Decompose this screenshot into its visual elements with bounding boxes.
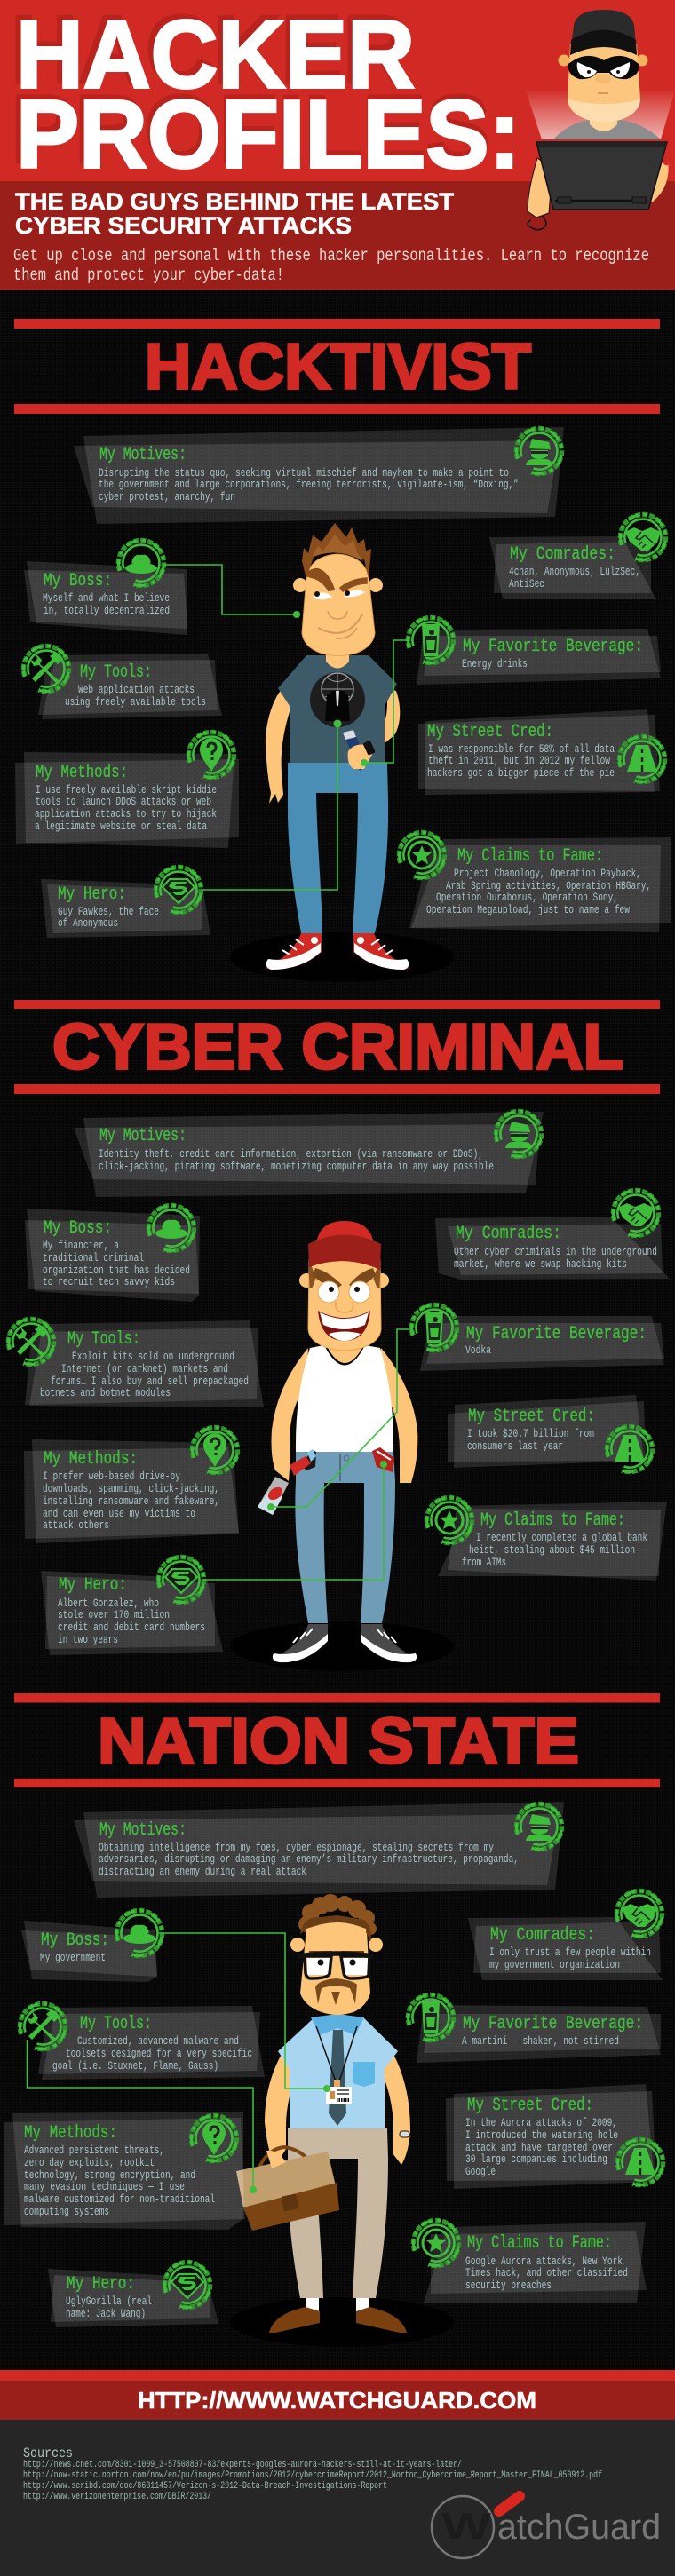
text block: the government and large corporations, freeing terrorists, vigilante-ism, “Doxing,” bbox=[99, 479, 519, 491]
title: HACKER bbox=[16, 0, 415, 108]
text block bbox=[43, 1470, 219, 1532]
footer banner bbox=[0, 2370, 675, 2420]
icon: location pin bbox=[191, 2116, 236, 2161]
text block: I prefer web-based drive-by bbox=[43, 1470, 180, 1483]
panel: hacktivist motives bbox=[74, 427, 564, 524]
text block bbox=[99, 1148, 494, 1173]
panel background bbox=[4, 2112, 245, 2230]
panel: criminal claims to fame bbox=[426, 1498, 667, 1581]
text block bbox=[467, 1428, 594, 1453]
panel background bbox=[417, 629, 661, 685]
section heading: Cyber Criminal: CYBER CRIMINAL bbox=[52, 1012, 623, 1083]
icon: glass bbox=[408, 618, 453, 663]
text block bbox=[509, 566, 640, 590]
panel background bbox=[435, 1217, 670, 1280]
heading: My Motives: bbox=[99, 445, 187, 465]
text block: Customized, advanced malware and bbox=[77, 2035, 239, 2048]
panel background bbox=[468, 1917, 663, 1980]
text block: Guy Fawkes, the face bbox=[58, 906, 159, 918]
panel background bbox=[25, 1209, 200, 1302]
sources: http://www.verizonenterprise.com/DBIR/2013/ bbox=[23, 2492, 211, 2502]
panel: hacktivist hero bbox=[41, 868, 210, 938]
panel background bbox=[24, 561, 187, 635]
intro paragraph bbox=[13, 246, 649, 285]
title bbox=[11, 0, 520, 188]
text block: organization that has decided bbox=[43, 1264, 190, 1277]
text block: Energy drinks bbox=[462, 658, 528, 670]
panel: hacktivist beverage bbox=[408, 618, 661, 685]
panel background bbox=[48, 2269, 218, 2327]
subtitle bbox=[15, 188, 455, 239]
text block: theft in 2011, but in 2012 my fellow bbox=[428, 755, 610, 767]
text block: a legitimate website or steal data bbox=[35, 820, 207, 833]
panel background bbox=[74, 1112, 544, 1197]
subtitle: THE BAD GUYS BEHIND THE LATEST bbox=[15, 188, 455, 215]
heading: My Hero: bbox=[59, 1575, 127, 1596]
panel background bbox=[420, 1316, 664, 1371]
icon: shield bbox=[158, 1557, 203, 1603]
text block: in two years bbox=[58, 1634, 118, 1646]
heading: My Comrades: bbox=[456, 1224, 561, 1244]
panel: criminal motives bbox=[74, 1112, 544, 1197]
text block: distracting an enemy during a real attack bbox=[99, 1866, 306, 1878]
text block: many evasion techniques — I use bbox=[24, 2181, 185, 2193]
text block: Obtaining intelligence from my foes, cyber espionage, stealing secrets from my bbox=[99, 1842, 494, 1854]
footer background bbox=[0, 2420, 675, 2576]
panel: criminal street cred bbox=[448, 1395, 652, 1472]
panel background bbox=[446, 2084, 656, 2189]
text block bbox=[43, 592, 170, 617]
panel: criminal comrades bbox=[435, 1191, 670, 1280]
section heading: Hacktivist bbox=[14, 319, 660, 414]
text block bbox=[52, 2035, 252, 2073]
text block: A martini – shaken, not stirred bbox=[462, 2035, 619, 2048]
text block bbox=[58, 1597, 205, 1646]
text block: UglyGorilla (real bbox=[66, 2295, 152, 2308]
panel background bbox=[417, 2005, 661, 2063]
text block: credit and debit card numbers bbox=[58, 1621, 205, 1634]
heading: My Street Cred: bbox=[467, 2096, 593, 2116]
section heading: Hacktivist: HACKTIVIST bbox=[145, 332, 531, 403]
panel: nation boss bbox=[21, 1911, 162, 1982]
icon: masked thief bbox=[516, 1804, 561, 1850]
panel: nation comrades bbox=[468, 1891, 663, 1980]
text block: downloads, spamming, click-jacking, bbox=[43, 1483, 219, 1495]
text block: of Anonymous bbox=[58, 917, 118, 930]
icon: location pin bbox=[188, 733, 234, 778]
heading: My Tools: bbox=[80, 662, 152, 683]
text block bbox=[24, 2144, 215, 2218]
icon: star bbox=[399, 833, 444, 878]
heading: My Claims to Fame: bbox=[467, 2233, 612, 2254]
panel: hacktivist methods bbox=[15, 733, 239, 848]
panel background bbox=[15, 752, 239, 848]
panel: criminal boss bbox=[25, 1206, 200, 1302]
panel: hacktivist comrades bbox=[489, 515, 665, 599]
connector: boss bbox=[163, 565, 300, 618]
text block: toolsets designed for a very specific bbox=[66, 2048, 252, 2060]
text block: forums… I also buy and sell prepackaged bbox=[51, 1375, 249, 1388]
text block: Google Aurora attacks, New York bbox=[465, 2255, 623, 2268]
text block: I was responsible for 58% of all data bbox=[428, 743, 615, 756]
text block: I took $20.7 billion from bbox=[467, 1428, 594, 1440]
icon: shield bbox=[164, 2263, 210, 2308]
text block: security breaches bbox=[465, 2279, 552, 2292]
sources: http://www.scribd.com/doc/86311457/Verizon-s-2012-Data-Breach-Investigations-Report bbox=[23, 2481, 387, 2492]
text block bbox=[454, 1246, 657, 1271]
text block: in, totally decentralized bbox=[44, 605, 170, 617]
panel: hacktivist boss bbox=[24, 541, 187, 635]
text block: Google bbox=[465, 2166, 496, 2178]
panel background bbox=[74, 1802, 564, 1898]
text block: goal (i.e. Stuxnet, Flame, Gauss) bbox=[52, 2060, 218, 2073]
section heading: Nation State: NATION STATE bbox=[98, 1707, 579, 1778]
panel: criminal tools bbox=[8, 1320, 264, 1407]
heading: My Tools: bbox=[68, 1329, 140, 1350]
icon: glass bbox=[408, 1995, 453, 2041]
text block: click-jacking, pirating software, monetizing computer data in any way possible bbox=[99, 1161, 494, 1173]
icon: star bbox=[426, 1498, 472, 1543]
heading: My Street Cred: bbox=[468, 1407, 595, 1427]
section heading: Nation State bbox=[14, 1693, 660, 1787]
text block: hackers got a bigger piece of the pie bbox=[427, 767, 615, 780]
text block: My financier, a bbox=[43, 1240, 119, 1252]
panel: nation motives bbox=[74, 1802, 564, 1898]
text block: technology, strong encryption, and bbox=[24, 2169, 195, 2182]
text block: cyber protest, anarchy, fun bbox=[99, 491, 235, 503]
panel background bbox=[38, 654, 222, 719]
text block: my government organization bbox=[489, 1959, 620, 1971]
panel background bbox=[448, 1395, 646, 1468]
panel background bbox=[409, 837, 671, 932]
heading: My Claims to Fame: bbox=[480, 1510, 625, 1531]
text block: Identity theft, credit card information, extortion (via ransomware or DDoS), bbox=[99, 1148, 483, 1161]
panel: nation claims to fame bbox=[413, 2221, 647, 2303]
text block bbox=[99, 1842, 519, 1878]
panel: criminal methods bbox=[24, 1428, 239, 1543]
text block bbox=[58, 906, 159, 930]
panel background bbox=[24, 1439, 239, 1543]
text block: malware customized for non-traditional bbox=[24, 2193, 215, 2206]
title: PROFILES: bbox=[16, 80, 520, 188]
text block: to recruit tech savvy kids bbox=[43, 1276, 175, 1288]
heading: My Hero: bbox=[58, 884, 126, 905]
text block: using freely available tools bbox=[65, 696, 206, 709]
text block: stole over 170 million bbox=[58, 1609, 170, 1621]
character: hacktivist bbox=[230, 523, 454, 982]
connector: tools bbox=[27, 2040, 257, 2193]
panel background bbox=[438, 1502, 667, 1581]
text block: AntiSec bbox=[509, 578, 544, 590]
icon: shield bbox=[155, 868, 201, 913]
text block: I use freely available skript kiddie bbox=[36, 784, 217, 797]
text block: Web application attacks bbox=[78, 684, 195, 696]
text block: consumers last year bbox=[467, 1440, 563, 1453]
text block: installing ransomware and fakeware, bbox=[43, 1495, 219, 1508]
section heading: Cyber Criminal bbox=[14, 1000, 660, 1094]
text block: Disrupting the status quo, seeking virtual mischief and mayhem to make a point to bbox=[99, 467, 509, 480]
sources bbox=[23, 2445, 602, 2502]
text block: adversaries, disrupting or damaging an enemy’s military infrastructure, propaganda, bbox=[99, 1853, 519, 1866]
panel: hacktivist tools bbox=[23, 646, 222, 719]
panel: nation tools bbox=[20, 2004, 265, 2080]
connector: hero bbox=[202, 1461, 387, 1580]
heading: My Claims to Fame: bbox=[457, 846, 603, 867]
panel: criminal beverage bbox=[411, 1305, 664, 1371]
text block: Exploit kits sold on underground bbox=[72, 1351, 234, 1363]
icon: road bbox=[617, 2140, 663, 2185]
connector: hero bbox=[202, 719, 341, 890]
character: nation state bbox=[230, 1894, 454, 2347]
text block: I introduced the watering hole bbox=[465, 2129, 618, 2142]
text block: from ATMs bbox=[462, 1557, 506, 1569]
heading: My Methods: bbox=[44, 1449, 138, 1470]
heading: My Motives: bbox=[99, 1820, 187, 1841]
heading: My Street Cred: bbox=[427, 722, 553, 742]
text block: Albert Gonzalez, who bbox=[58, 1597, 159, 1610]
character: cyber criminal bbox=[230, 1221, 454, 1671]
heading: My Boss: bbox=[41, 1930, 109, 1951]
footer banner: HTTP://WWW.WATCHGUARD.COM bbox=[138, 2387, 536, 2414]
icon: handshake bbox=[616, 1891, 662, 1937]
text block bbox=[465, 2255, 628, 2292]
panel: nation beverage bbox=[408, 1995, 661, 2063]
text block: tools to launch DDoS attacks or web bbox=[36, 796, 211, 808]
title: PROFILES bbox=[11, 75, 490, 184]
panel background bbox=[41, 1571, 223, 1655]
text block: Advanced persistent threats, bbox=[24, 2144, 164, 2157]
icon: hat bbox=[118, 541, 163, 586]
text block: botnets and botnet modules bbox=[40, 1387, 171, 1399]
panel background bbox=[21, 1921, 157, 1982]
text block: attack and have targeted over bbox=[465, 2142, 613, 2154]
subtitle: CYBER SECURITY ATTACKS bbox=[15, 212, 352, 239]
panel background bbox=[424, 2222, 647, 2303]
icon: hat bbox=[116, 1911, 162, 1956]
panel: nation street cred bbox=[446, 2084, 663, 2189]
text block bbox=[66, 2295, 152, 2320]
text block: Times hack, and other classified bbox=[465, 2267, 628, 2279]
panel background bbox=[41, 879, 210, 938]
icon: location pin bbox=[192, 1428, 237, 1473]
connector: beverage bbox=[267, 1329, 413, 1510]
text block bbox=[99, 467, 519, 503]
text block: attack others bbox=[43, 1519, 109, 1532]
text block: Internet (or darknet) markets and bbox=[61, 1363, 228, 1375]
icon: masked thief bbox=[516, 429, 561, 474]
icon: masked thief bbox=[496, 1112, 541, 1157]
intro paragraph: them and protect your cyber-data! bbox=[13, 266, 284, 285]
text block: Vodka bbox=[465, 1344, 491, 1357]
text block bbox=[65, 684, 206, 709]
heading: My Boss: bbox=[44, 1218, 112, 1239]
connector: beverage bbox=[361, 640, 407, 766]
text block bbox=[465, 2117, 618, 2178]
heading: My Comrades: bbox=[510, 544, 615, 565]
text block bbox=[426, 868, 651, 916]
text block: computing systems bbox=[24, 2206, 109, 2218]
panel background bbox=[74, 427, 564, 524]
icon: tools bbox=[8, 1320, 53, 1365]
text block: and can even use my victims to bbox=[43, 1508, 195, 1520]
heading: My Boss: bbox=[44, 571, 112, 591]
connector: boss bbox=[159, 1933, 330, 2092]
text block: name: Jack Wang) bbox=[66, 2308, 146, 2320]
heading: My Motives: bbox=[99, 1126, 187, 1146]
panel: hacktivist claims to fame bbox=[399, 833, 671, 932]
text block: zero day exploits, rootkit bbox=[24, 2157, 155, 2169]
panel background bbox=[38, 2006, 265, 2080]
logo: WatchGuard: W bbox=[441, 2505, 491, 2547]
sources: http://news.cnet.com/8301-1009_3-57508807-83/experts-googles-aurora-hackers-still-at-it-years-later/ bbox=[23, 2460, 462, 2470]
icon: road bbox=[619, 737, 664, 782]
logo: WatchGuard bbox=[432, 2496, 661, 2558]
text block: application attacks to try to hijack bbox=[35, 808, 217, 820]
text block: Myself and what I believe bbox=[43, 592, 170, 605]
text block bbox=[489, 1946, 651, 1971]
heading: My Comrades: bbox=[490, 1925, 595, 1946]
icon: handshake bbox=[620, 515, 665, 560]
heading: My Tools: bbox=[80, 2014, 152, 2034]
icon: tools bbox=[23, 646, 68, 692]
text block bbox=[43, 1240, 190, 1288]
text block: My government bbox=[40, 1952, 106, 1964]
icon: star bbox=[413, 2221, 458, 2266]
heading: My Methods: bbox=[24, 2123, 117, 2144]
panel: hacktivist street cred bbox=[418, 709, 664, 795]
icon: tools bbox=[20, 2004, 65, 2049]
heading: My Methods: bbox=[36, 763, 128, 783]
text block: In the Aurora attacks of 2009, bbox=[465, 2117, 617, 2129]
heading: My Hero: bbox=[67, 2274, 135, 2295]
text block bbox=[35, 784, 217, 833]
text block: 30 large companies including bbox=[465, 2153, 608, 2166]
logo: WatchGuard: atchGuard bbox=[497, 2508, 661, 2547]
text block: traditional criminal bbox=[43, 1252, 144, 1264]
illustration: masked hacker at laptop bbox=[526, 10, 675, 230]
sources: Sources bbox=[23, 2445, 73, 2461]
panel: nation hero bbox=[48, 2263, 218, 2327]
text block bbox=[462, 1532, 647, 1569]
text block: market, where we swap hacking kits bbox=[454, 1258, 627, 1271]
panel background bbox=[489, 536, 656, 599]
panel: nation methods bbox=[4, 2112, 245, 2230]
icon: glass bbox=[411, 1305, 457, 1351]
header band bbox=[0, 0, 675, 290]
icon: handshake bbox=[613, 1191, 658, 1236]
panel background bbox=[418, 709, 660, 795]
panel background bbox=[25, 1320, 264, 1407]
icon: hat bbox=[148, 1206, 194, 1251]
panel: criminal hero bbox=[41, 1557, 223, 1655]
icon: road bbox=[607, 1427, 652, 1472]
text block bbox=[427, 743, 615, 780]
text block: Operation Ouraborus, Operation Sony, bbox=[436, 892, 618, 904]
text block bbox=[40, 1351, 249, 1399]
